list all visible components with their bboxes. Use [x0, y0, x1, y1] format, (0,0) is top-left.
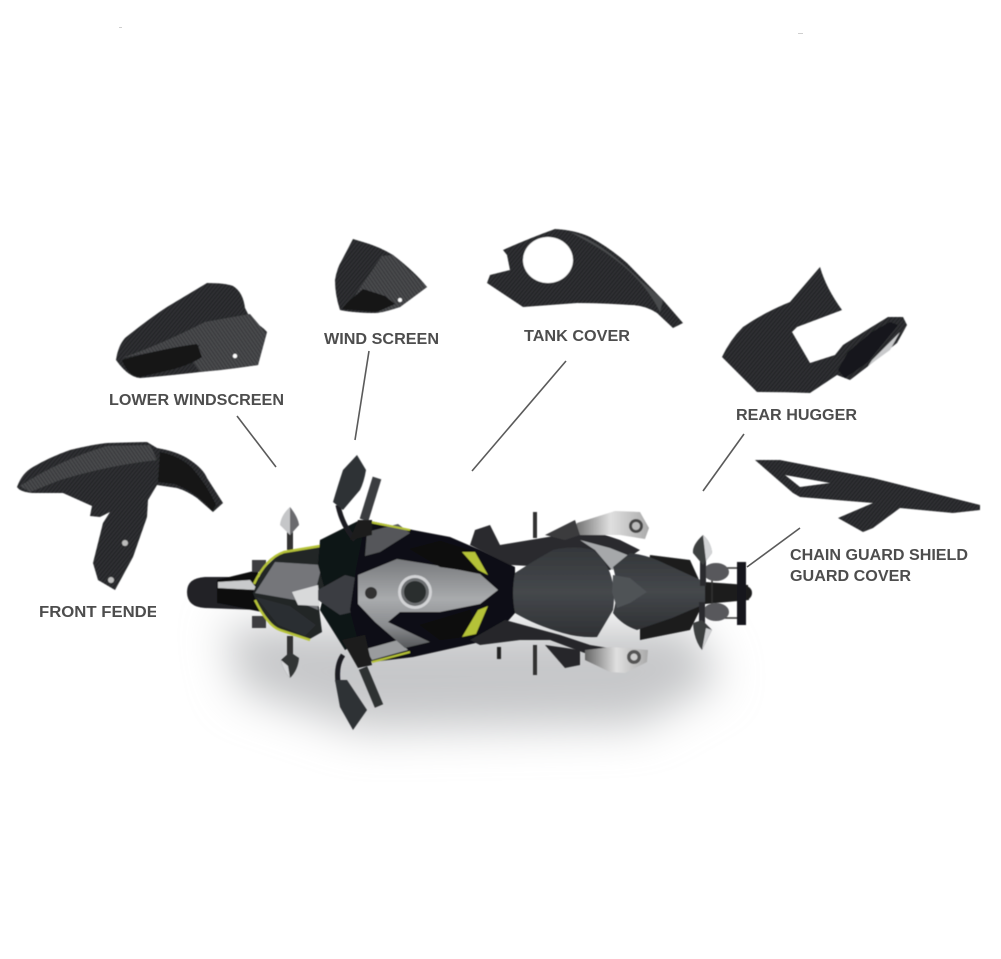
infographic: motorcycle carbon parts diagram	[16, 27, 981, 752]
part: chain guard shield	[755, 460, 980, 532]
rear turn signal top	[693, 535, 712, 586]
part: lower windscreen	[116, 283, 267, 378]
rear frame dark	[640, 555, 705, 640]
ground shadow	[225, 625, 720, 730]
top exhaust	[545, 511, 649, 540]
seat centre cone	[612, 575, 647, 608]
front turn signal bottom	[281, 636, 299, 678]
tank silver panel	[358, 541, 498, 648]
label: wind screen: WIND SCREEN	[324, 331, 439, 348]
front mudguard	[217, 570, 262, 612]
label: rear hugger: REAR HUGGER	[736, 407, 857, 424]
rider seat	[513, 548, 614, 637]
main tank body	[350, 520, 515, 662]
label: lower windscreen: LOWER WINDSCREEN	[109, 392, 284, 409]
mirror bottom	[335, 680, 367, 730]
front tyre	[187, 577, 262, 610]
front turn signal top	[280, 507, 299, 550]
rear turn signal bottom	[693, 602, 712, 650]
frame and side parts	[470, 525, 640, 570]
bottom exhaust	[585, 647, 648, 673]
label: front fender (clipped): FRONT FENDER	[39, 604, 170, 621]
handlebar grip top	[364, 478, 377, 520]
tail unit	[703, 562, 752, 625]
headlight cowl	[253, 546, 340, 640]
label: tank cover: TANK COVER	[524, 328, 630, 345]
part: front fender	[17, 442, 223, 590]
handlebar grip bottom	[363, 668, 379, 706]
mirror stem top	[338, 505, 355, 540]
motorcycle top view	[187, 455, 752, 730]
part: wind screen	[335, 239, 427, 313]
fuel cap	[398, 575, 432, 609]
mirror top	[333, 455, 366, 510]
mirror stem bottom	[338, 655, 343, 682]
mount holes	[122, 540, 128, 546]
label: guard cover: GUARD COVER	[790, 568, 911, 585]
label: chain guard shield: CHAIN GUARD SHIELD	[790, 547, 968, 564]
steering and fork area	[318, 520, 372, 650]
leader lines	[237, 351, 800, 567]
part: rear hugger	[722, 267, 907, 393]
part: tank cover	[487, 229, 683, 328]
top specks	[119, 27, 803, 34]
mount holes	[233, 354, 237, 358]
pillion seat	[613, 553, 707, 630]
